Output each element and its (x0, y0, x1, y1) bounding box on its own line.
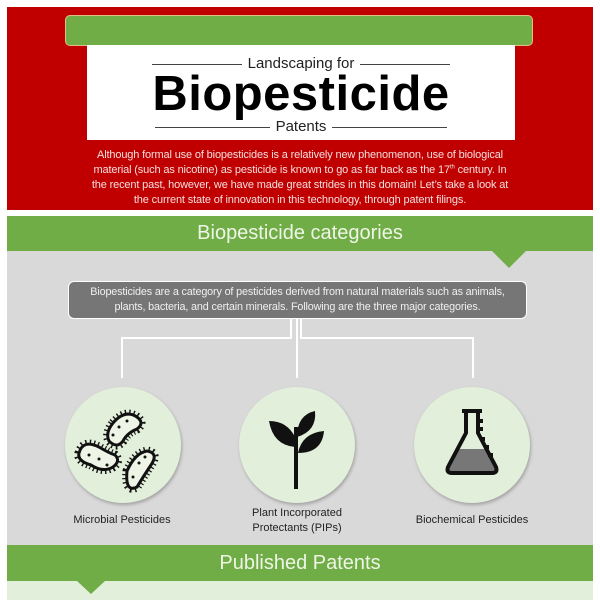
panel: published patents (7, 545, 593, 600)
description box: plants, bacteria, and certain minerals. Following are the three major categories. (115, 301, 480, 313)
pointer triangle (77, 581, 105, 594)
connectors (121, 319, 474, 378)
label: PIPs (252, 507, 342, 534)
icon: flask (446, 409, 498, 475)
icon: plant (269, 411, 324, 489)
heading bar (7, 545, 593, 581)
title box (87, 45, 515, 140)
description box: Biopesticides are a category of pesticides derived from natural materials such as animals, (90, 286, 505, 298)
label: PIPs: Protectants (PIPs) (252, 522, 342, 534)
label: microbial: Microbial Pesticides (73, 514, 171, 526)
intro text (92, 149, 508, 206)
subtitle top: Landscaping for (248, 55, 354, 72)
pointer triangle (492, 251, 526, 268)
label: biochemical: Biochemical Pesticides (416, 514, 528, 526)
heading bar (7, 216, 593, 251)
circle: plant (239, 387, 355, 503)
intro text: Although formal use of biopesticides is a relatively new phenomenon, use of biological (97, 149, 503, 161)
intro text: the recent past, however, we have made great strides in this domain! Let’s take a look at (92, 179, 508, 191)
panel: categories (7, 216, 593, 545)
heading bar: Biopesticide categories (197, 222, 403, 244)
label: PIPs: Plant Incorporated (252, 507, 342, 519)
circle: microbial (65, 387, 181, 503)
panel: header red (7, 7, 593, 210)
intro text: the current state of innovation in this technology, through patent filings. (134, 194, 466, 206)
title: Biopesticide (152, 67, 450, 121)
description box (68, 281, 527, 319)
subtitle bottom: Patents (276, 118, 326, 135)
icon: bacteria (74, 410, 159, 493)
circle: biochemical (414, 387, 530, 503)
intro text: material (such as nicotine) as pesticide is known to go as far back as the 17th century. In (93, 164, 507, 176)
green banner (65, 15, 533, 46)
heading bar: Published Patents (219, 552, 381, 574)
